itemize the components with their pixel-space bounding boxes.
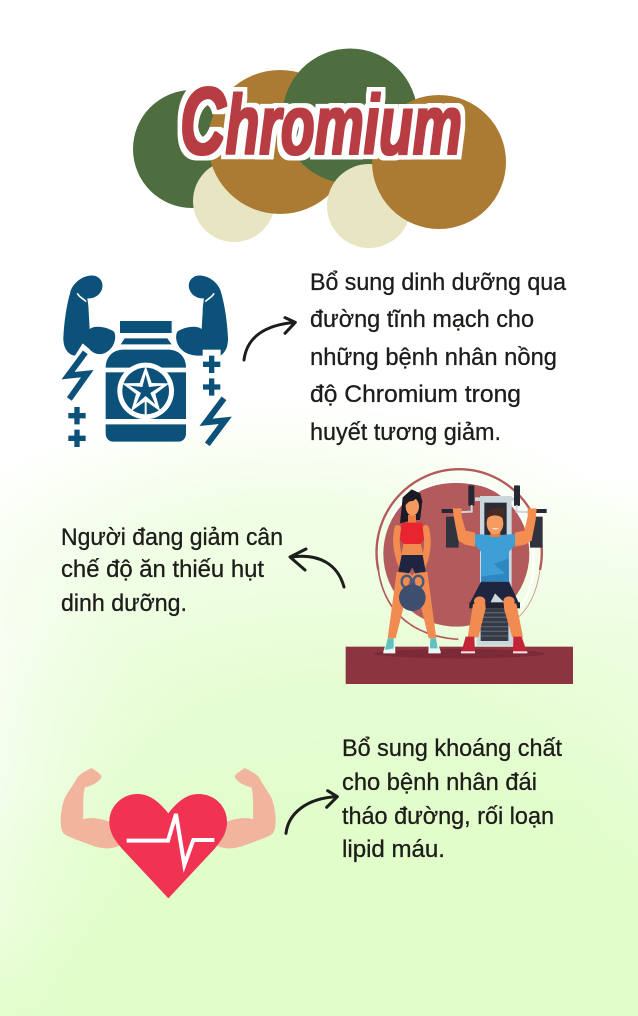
label emblem xyxy=(117,363,174,419)
hair xyxy=(486,508,504,519)
midriff xyxy=(401,544,423,556)
text block: intravenous nutrition: đường tĩnh mạch cho xyxy=(310,306,534,333)
arms xyxy=(453,508,475,547)
arrow to first text xyxy=(244,318,295,360)
arm left xyxy=(61,768,121,848)
bottle shoulder xyxy=(106,350,186,368)
icon: heart with muscular arms xyxy=(61,768,337,898)
kettlebell xyxy=(402,576,412,588)
bottle label band xyxy=(106,372,186,419)
arm right xyxy=(216,768,276,848)
face xyxy=(406,498,419,516)
backdrop ring xyxy=(376,469,542,570)
lightning left xyxy=(68,352,87,399)
shorts xyxy=(398,555,426,573)
heart xyxy=(109,794,227,898)
circle: left green xyxy=(133,90,251,208)
arms xyxy=(396,528,427,577)
title: Chromium xyxy=(180,68,462,175)
pulse line xyxy=(127,814,214,865)
bottle lid xyxy=(120,321,172,333)
bottle neck xyxy=(121,338,172,344)
floor shadow xyxy=(374,649,545,658)
text block: intravenous nutrition: những bệnh nhân nồng xyxy=(310,344,557,371)
sneakers xyxy=(461,637,475,653)
text block: intravenous nutrition: độ Chromium trong xyxy=(310,381,521,408)
circle: right ochre xyxy=(372,95,506,229)
floor xyxy=(346,647,573,684)
text block: intravenous nutrition: Bổ sung dinh dưỡng qua xyxy=(310,269,567,296)
plus signs xyxy=(68,356,220,447)
legs xyxy=(388,572,410,638)
text block: diabetes and lipid disorders: cho bệnh nhân đái xyxy=(342,769,537,796)
woman xyxy=(383,489,441,653)
title badge xyxy=(133,48,506,248)
text block: weight loss diets xyxy=(61,524,283,617)
face xyxy=(487,512,503,534)
gym machine xyxy=(442,485,547,646)
text block: diabetes and lipid disorders: lipid máu. xyxy=(342,836,445,863)
neck xyxy=(490,528,500,537)
text block: intravenous nutrition: huyết tương giảm. xyxy=(310,419,501,446)
bottle base xyxy=(106,424,186,442)
text block: weight loss diets: dinh dưỡng. xyxy=(61,590,187,617)
circle: left ochre xyxy=(208,70,352,214)
illustration: gym couple xyxy=(346,469,573,684)
neck xyxy=(408,515,416,525)
text block: diabetes and lipid disorders: Bổ sung khoáng chất xyxy=(342,735,562,762)
arm creases xyxy=(77,293,214,302)
shirt xyxy=(475,534,515,582)
text block: diabetes and lipid disorders: tháo đường, rối loạn xyxy=(342,803,554,830)
left arm xyxy=(63,276,115,356)
text block: intravenous nutrition xyxy=(310,269,567,446)
lightning right xyxy=(206,398,225,444)
knees xyxy=(474,596,485,606)
text block: weight loss diets: chế độ ăn thiếu hụt xyxy=(61,556,264,583)
text block: diabetes and lipid disorders xyxy=(342,735,562,863)
arrow to third text xyxy=(286,791,337,833)
circle: right cream xyxy=(327,164,411,248)
man xyxy=(453,508,537,653)
circle: top green xyxy=(282,48,418,184)
sneakers xyxy=(383,638,395,653)
backdrop circle xyxy=(383,481,529,627)
arrow to second text xyxy=(290,549,344,587)
hair xyxy=(400,489,422,523)
right arm xyxy=(176,276,228,356)
white gap below right arm xyxy=(203,350,221,356)
smile xyxy=(492,528,499,529)
legs xyxy=(468,597,486,637)
white swoosh arc xyxy=(392,482,534,607)
crop top xyxy=(400,523,424,544)
circle: left cream xyxy=(193,160,275,242)
text block: weight loss diets: Người đang giảm cân xyxy=(61,524,283,551)
icon: supplement bottle with muscular arms xyxy=(63,276,295,447)
shorts xyxy=(469,582,519,604)
